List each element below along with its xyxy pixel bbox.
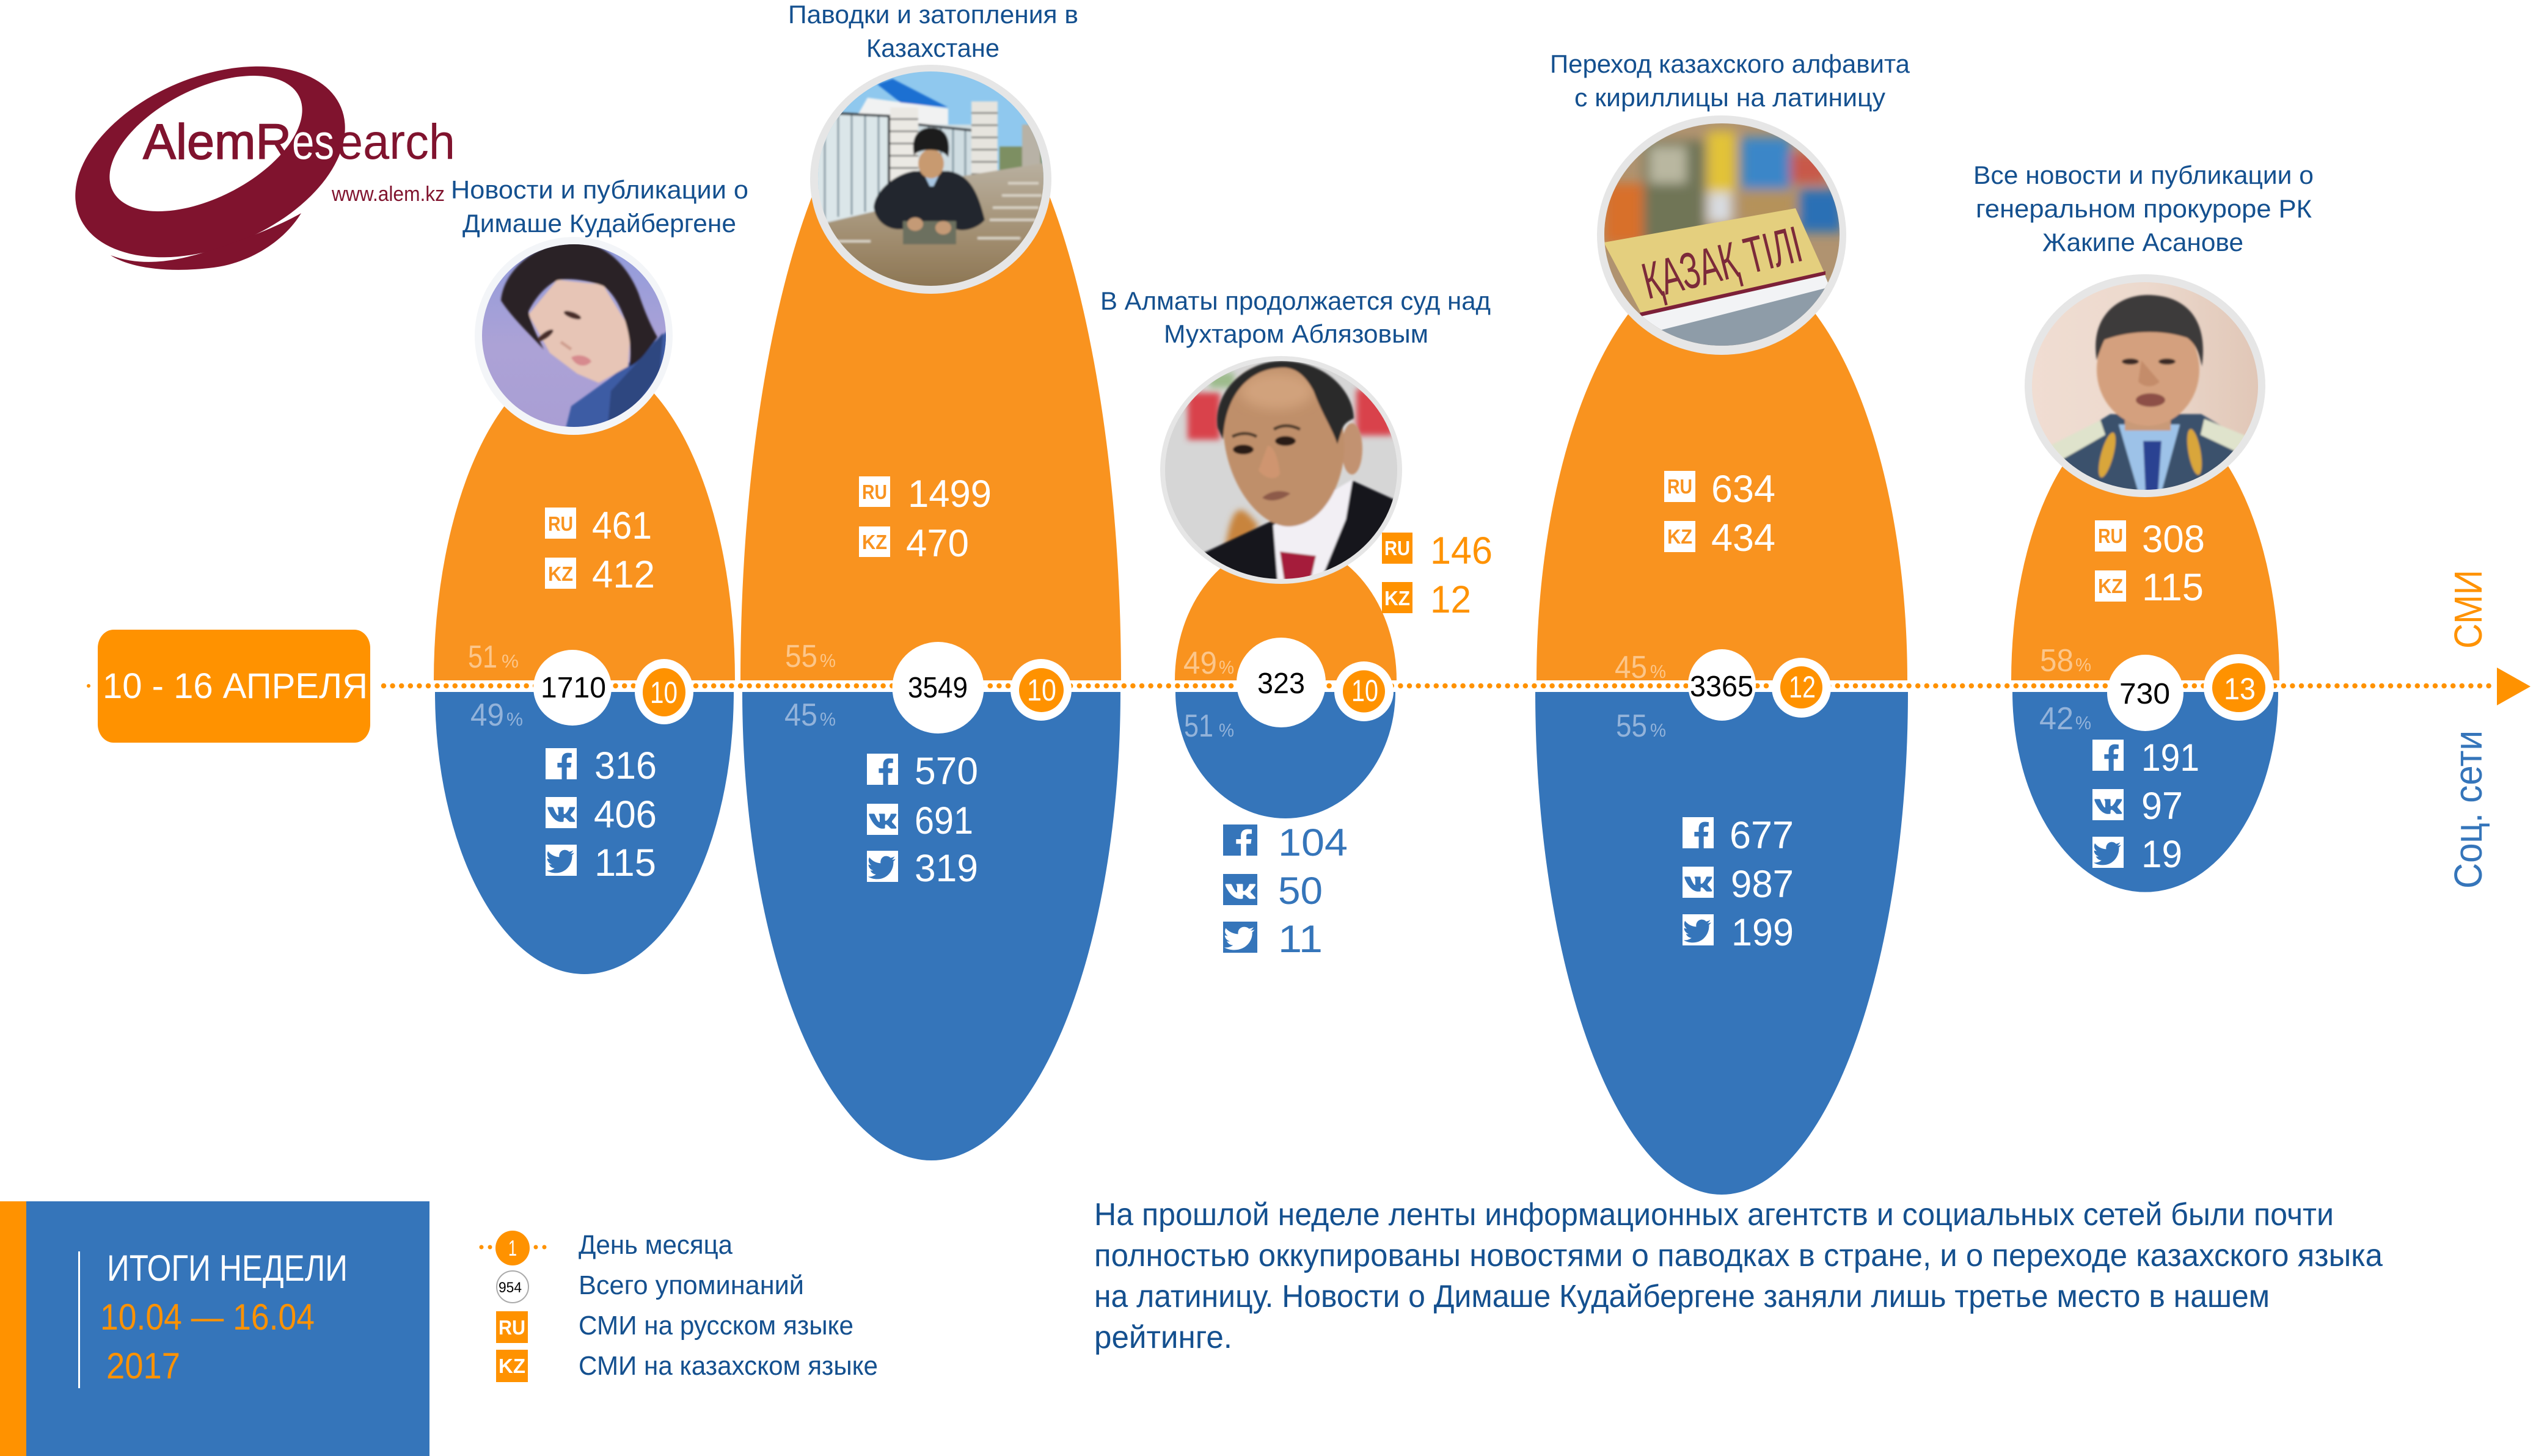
bubble 2: social half	[742, 692, 1120, 1160]
media share: 45	[1615, 650, 1647, 685]
topic 3: Ablyazov trial	[1100, 286, 1493, 961]
social share: 51	[1184, 708, 1213, 744]
total mentions	[892, 642, 984, 733]
social share: 45	[784, 697, 817, 733]
icon: vk	[546, 797, 577, 828]
media share	[1183, 646, 1234, 681]
media share: %	[820, 650, 836, 671]
topic 5: Asanov	[1973, 161, 2314, 876]
social counts	[1683, 814, 1794, 954]
icon: facebook	[546, 748, 577, 779]
social counts	[546, 744, 657, 884]
social share	[784, 697, 836, 733]
icon: KZ: KZ	[548, 562, 573, 585]
social share: %	[1650, 719, 1666, 741]
topic 4: Kazakh alphabet	[1550, 49, 1910, 954]
bubble 1: social half	[435, 692, 734, 974]
total mentions	[2107, 655, 2183, 731]
icon: KZ	[859, 526, 890, 557]
icon: twitter	[1223, 922, 1257, 953]
icon: facebook	[1683, 817, 1714, 848]
icon: KZ: KZ	[2098, 575, 2123, 597]
social share: 55	[1616, 708, 1647, 744]
social counts: 691	[915, 799, 973, 842]
media counts: 461	[592, 504, 652, 547]
day marker: 10	[1351, 674, 1378, 708]
legend: Kazakh media: KZ	[499, 1355, 525, 1377]
portrait photo	[2025, 274, 2265, 497]
icon: KZ	[2095, 570, 2126, 602]
media share	[1615, 650, 1666, 685]
topic title	[1973, 161, 2314, 257]
day marker: 12	[1789, 670, 1816, 704]
total mentions: 730	[2119, 678, 2170, 710]
logo wordmark: AlemR	[143, 114, 291, 170]
legend: Russian media: СМИ на русском языке	[579, 1311, 853, 1341]
icon: KZ: KZ	[1384, 587, 1410, 610]
media counts: 412	[592, 553, 655, 596]
legend: day of month: 1	[508, 1236, 517, 1261]
social counts: 987	[1731, 863, 1794, 906]
summary paragraph: рейтинге.	[1094, 1320, 1232, 1355]
media counts: 1499	[908, 473, 992, 515]
media counts	[2095, 518, 2205, 609]
social counts: 50	[1278, 870, 1323, 912]
bubble 3: social half	[1175, 692, 1395, 818]
topic title	[1550, 49, 1910, 112]
legend: total mentions: Всего упоминаний	[579, 1270, 804, 1300]
social counts: 97	[2141, 785, 2183, 828]
topic title: Мухтаром Аблязовым	[1164, 319, 1428, 348]
panel year: 2017	[106, 1345, 180, 1386]
day marker: 13	[2224, 672, 2256, 706]
summary paragraph: полностью оккупированы новостями о паводках в стране, и о переходе казахского языка	[1094, 1238, 2383, 1273]
topic title: генеральном прокуроре РК	[1976, 194, 2312, 223]
icon: RU: RU	[548, 512, 573, 535]
topic title	[788, 0, 1078, 62]
social counts: 677	[1730, 814, 1794, 857]
legend: Kazakh media: СМИ на казахском языке	[579, 1351, 878, 1381]
axis arrow	[2497, 668, 2531, 705]
media share: %	[502, 650, 519, 672]
social counts: 104	[1278, 821, 1348, 864]
bubble 5: social half	[2012, 692, 2278, 892]
day marker: 10	[650, 675, 678, 710]
logo: Alem Research	[46, 29, 455, 294]
media counts	[1382, 530, 1493, 621]
media counts: 12	[1430, 578, 1471, 621]
portrait photo	[475, 237, 673, 435]
social counts: 19	[2141, 833, 2182, 876]
panel heading: ИТОГИ НЕДЕЛИ	[107, 1248, 348, 1289]
legend: day of month: День месяца	[579, 1230, 733, 1260]
social counts: 570	[915, 750, 978, 793]
media counts: 434	[1711, 517, 1775, 559]
media share: 55	[785, 639, 817, 674]
social counts: 319	[915, 847, 978, 890]
icon: RU: RU	[1384, 537, 1410, 559]
icon: RU	[859, 476, 890, 507]
summary paragraph: на латиницу. Новости о Димаше Кудайбергене заняли лишь третье место в нашем	[1094, 1279, 2270, 1314]
bubble 4: social half	[1535, 692, 1908, 1195]
logo wordmark	[143, 114, 455, 170]
media counts	[859, 473, 992, 565]
topic title: Казахстане	[866, 34, 999, 62]
media counts	[1664, 468, 1775, 559]
icon: twitter	[1683, 914, 1714, 945]
date box: 10 - 16 АПРЕЛЯ	[103, 666, 368, 706]
legend: Russian media	[496, 1311, 853, 1343]
summary paragraph: На прошлой неделе ленты информационных агентств и социальных сетей были почти	[1094, 1197, 2334, 1232]
portrait photo	[1160, 356, 1405, 584]
media share: 58	[2040, 643, 2074, 679]
social share: %	[2075, 712, 2091, 733]
panel: week summary	[0, 1201, 429, 1456]
logo wordmark: es	[292, 114, 334, 170]
day marker	[1772, 658, 1831, 718]
day marker	[2204, 654, 2274, 721]
media share: %	[1219, 657, 1234, 678]
icon: vk	[1223, 874, 1257, 905]
summary paragraph	[1094, 1197, 2383, 1355]
media counts: 308	[2142, 518, 2205, 561]
icon: RU: RU	[1667, 475, 1692, 498]
bubble 4: media half	[1537, 256, 1907, 680]
icon: RU	[1664, 471, 1695, 502]
flood photo	[810, 65, 1051, 294]
icon: twitter	[546, 845, 577, 876]
timeline dotted axis	[384, 683, 2496, 688]
topic title	[1100, 286, 1491, 348]
media share: 51	[468, 639, 497, 675]
axis start dot	[87, 684, 90, 688]
logo url: www.alem.kz	[331, 183, 445, 206]
logo emblem	[46, 29, 374, 294]
icon: vk	[867, 804, 898, 835]
day marker	[635, 659, 693, 724]
legend: Russian media: RU	[499, 1316, 525, 1339]
social counts: 191	[2141, 737, 2199, 779]
topic title: Все новости и публикации о	[1973, 161, 2314, 189]
topic title: Димаше Кудайбергене	[462, 209, 736, 238]
legend: total mentions	[497, 1270, 804, 1303]
date box	[98, 630, 370, 743]
icon: facebook	[1223, 824, 1257, 856]
total mentions	[533, 650, 612, 726]
topic title	[451, 175, 748, 238]
media counts	[545, 504, 655, 596]
social share	[2039, 701, 2091, 737]
panel dates: 10.04 — 16.04	[100, 1297, 315, 1338]
media share: %	[2075, 654, 2091, 675]
total mentions	[1237, 638, 1326, 727]
day marker	[1334, 661, 1394, 721]
legend	[481, 1230, 878, 1382]
total mentions: 3365	[1690, 671, 1753, 703]
bubble 2: media half	[740, 197, 1121, 680]
icon: KZ: KZ	[1667, 525, 1692, 548]
social counts: 316	[594, 744, 657, 787]
icon: KZ: KZ	[862, 531, 887, 553]
media share: 49	[1183, 646, 1217, 681]
media share	[468, 639, 519, 675]
media counts: 634	[1711, 468, 1775, 511]
social share: %	[1219, 719, 1234, 741]
social share	[470, 697, 523, 733]
icon: RU	[2095, 520, 2126, 551]
topic title: Паводки и затопления в	[788, 0, 1078, 29]
social counts: 11	[1278, 918, 1323, 961]
icon: facebook	[2092, 740, 2124, 771]
social share: %	[506, 708, 523, 730]
topic title: Новости и публикации о	[451, 175, 748, 204]
icon: KZ	[1382, 582, 1412, 613]
legend: total mentions: 954	[499, 1279, 522, 1296]
day marker: 10	[1027, 673, 1056, 707]
bubble 5: media half	[2011, 408, 2279, 680]
axis label: Соц. сети: Соц. сети	[2446, 730, 2490, 889]
icon: RU	[1382, 533, 1412, 564]
social counts: 406	[594, 793, 657, 836]
topic title: Жакипе Асанове	[2042, 228, 2243, 257]
topic 2: floods	[784, 0, 1078, 890]
media counts: 146	[1430, 530, 1493, 572]
social counts	[2092, 737, 2199, 876]
axis label: СМИ: СМИ	[2446, 570, 2490, 649]
icon: RU: RU	[862, 481, 887, 503]
icon: RU	[545, 508, 576, 539]
social counts: 115	[594, 842, 656, 884]
bubble 1: media half	[434, 357, 735, 680]
social share: 42	[2039, 701, 2074, 737]
icon: twitter	[2092, 837, 2124, 868]
media counts: 470	[906, 522, 969, 565]
book sign photo	[1597, 115, 1846, 360]
topic 1: Dimash	[451, 175, 748, 884]
sign text: ҚАЗАҚ ТІЛІ	[1637, 215, 1807, 310]
icon: twitter	[867, 851, 898, 882]
social counts	[1223, 821, 1348, 961]
total mentions: 3549	[908, 672, 968, 704]
day marker	[1010, 659, 1072, 721]
total mentions	[1688, 649, 1756, 721]
icon: vk	[1683, 867, 1714, 898]
icon: RU: RU	[2098, 525, 2123, 547]
social counts: 199	[1731, 911, 1794, 954]
social counts	[867, 750, 978, 890]
media counts: 115	[2142, 566, 2204, 609]
bubble 3: media half	[1175, 542, 1397, 680]
media share	[2040, 643, 2091, 679]
icon: KZ	[1664, 521, 1695, 552]
legend: day of month	[481, 1230, 733, 1265]
total mentions: 1710	[541, 672, 606, 704]
icon: KZ	[545, 558, 576, 589]
icon: facebook	[867, 754, 898, 785]
media share	[785, 639, 836, 674]
icon: vk	[2092, 789, 2124, 820]
total mentions: 323	[1257, 668, 1305, 700]
social share: %	[820, 708, 836, 730]
topic title: Переход казахского алфавита	[1550, 49, 1910, 78]
topic title: В Алматы продолжается суд над	[1100, 286, 1491, 315]
media share: %	[1650, 661, 1666, 682]
social share: 49	[470, 697, 504, 733]
logo wordmark: earch	[337, 114, 455, 170]
topic title: с кириллицы на латиницу	[1574, 83, 1885, 112]
